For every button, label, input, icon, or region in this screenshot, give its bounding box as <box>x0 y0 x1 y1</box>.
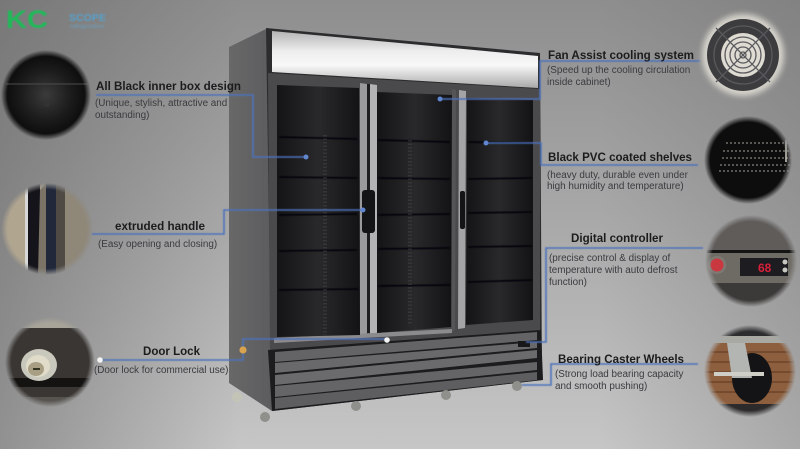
line: door lock <box>100 339 387 360</box>
label: controller <box>549 231 678 288</box>
photo: door lock <box>5 317 95 407</box>
label: extruded handle: extruded handle <box>115 219 205 233</box>
base louvers <box>268 330 543 411</box>
label: shelves: high humidity and temperature) <box>547 181 684 192</box>
label: controller: Digital controller <box>571 231 663 245</box>
label: black inner box <box>95 79 241 121</box>
photo: controller <box>705 215 797 307</box>
logo <box>6 6 106 34</box>
logo: refrigeration <box>70 24 104 30</box>
refrigerator <box>229 28 543 422</box>
label: black inner box: outstanding) <box>95 110 149 121</box>
label: controller: temperature with auto defrost <box>549 265 678 276</box>
line: shelves <box>486 143 698 165</box>
label: extruded handle <box>98 219 217 250</box>
label: casters: Bearing Caster Wheels <box>558 352 684 366</box>
glass center door <box>377 92 452 333</box>
label: fan: inside cabinet) <box>547 77 611 88</box>
glass left door <box>277 85 360 337</box>
label: door lock: (Door lock for commercial use) <box>94 365 228 376</box>
label: shelves: Black PVC coated shelves <box>548 150 692 164</box>
shelves <box>279 137 532 290</box>
connector dots <box>97 96 488 363</box>
photo: extruded handle <box>1 183 93 275</box>
label: extruded handle: (Easy opening and closing) <box>98 239 217 250</box>
door frame <box>268 73 540 350</box>
label: casters <box>555 352 684 392</box>
label: controller: (precise control & display of <box>549 253 671 264</box>
photo: shelves <box>704 116 792 204</box>
logo: KC <box>6 6 48 34</box>
label: shelves <box>547 150 692 192</box>
photo: caster wheel <box>704 325 796 417</box>
photo: fan <box>702 14 784 96</box>
line: fan <box>440 61 700 99</box>
cabinet front <box>266 28 542 411</box>
glass right door <box>466 98 533 325</box>
label: door lock <box>94 344 228 376</box>
line: casters <box>522 364 698 385</box>
logo: SCOPE <box>69 13 106 24</box>
label: fan <box>547 48 694 88</box>
label: black inner box: All Black inner box design <box>96 79 241 93</box>
label: casters: (Strong load bearing capacity <box>555 369 684 380</box>
label: fan: Fan Assist cooling system <box>548 48 694 62</box>
door handles <box>362 190 465 233</box>
label: controller: function) <box>549 277 587 288</box>
shelf peg strips <box>325 135 410 335</box>
label: casters: and smooth pushing) <box>555 381 647 392</box>
connector lines <box>92 61 703 385</box>
label: door lock: Door Lock <box>143 344 200 358</box>
line: black inner box <box>96 95 306 157</box>
photo: controller: 68 <box>758 261 772 275</box>
canopy light box <box>272 31 538 88</box>
line: controller <box>526 248 703 342</box>
label: black inner box: (Unique, stylish, attractive and <box>95 98 227 109</box>
label: fan: (Speed up the cooling circulation <box>547 65 690 76</box>
photo: black inner box <box>1 50 91 140</box>
caster wheels <box>232 381 522 422</box>
cabinet side <box>229 28 272 411</box>
line: extruded handle <box>92 210 363 234</box>
label: shelves: (heavy duty, durable even under <box>547 170 689 181</box>
